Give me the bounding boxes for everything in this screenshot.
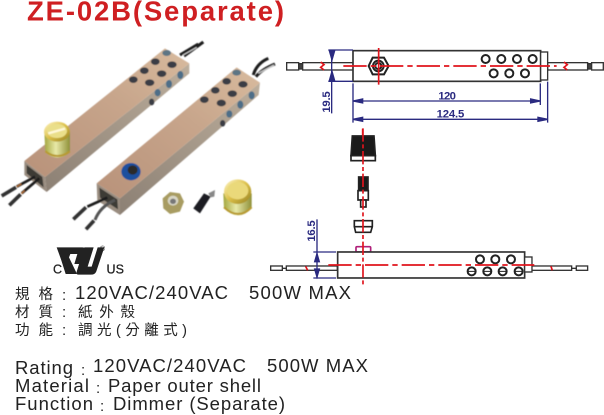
left dimmer bar bbox=[2, 42, 203, 205]
shaft bbox=[193, 190, 215, 213]
Chinese specifications: 500W MAX bbox=[249, 282, 351, 303]
wires bbox=[271, 266, 588, 270]
end tab bbox=[525, 257, 532, 272]
Chinese specifications: 120VAC/240VAC bbox=[75, 282, 228, 303]
UL certification mark: ® bbox=[100, 245, 106, 253]
Chinese specifications: : bbox=[62, 287, 66, 304]
top-view technical drawing bbox=[287, 48, 603, 137]
label: 19.5: 19.5 bbox=[321, 91, 333, 113]
holes bbox=[468, 255, 523, 275]
product photo bbox=[2, 42, 275, 229]
label: 120: 120 bbox=[438, 90, 456, 102]
English specifications: Material bbox=[15, 375, 89, 396]
Chinese specifications: : bbox=[62, 304, 66, 321]
blue grommet bbox=[121, 163, 141, 180]
threaded shaft bbox=[358, 177, 368, 207]
vent holes bbox=[482, 55, 537, 77]
Chinese specifications: 調光(分離式) bbox=[78, 321, 187, 339]
bar body bbox=[353, 51, 541, 81]
right wire bbox=[548, 63, 603, 70]
bar body bbox=[338, 252, 525, 278]
English specifications: Paper outer shell bbox=[108, 375, 261, 396]
label: 124.5: 124.5 bbox=[437, 109, 464, 121]
hex nut bbox=[163, 192, 184, 214]
English specifications: Function bbox=[15, 393, 93, 414]
dimensions bbox=[313, 219, 336, 278]
English specifications: 500W MAX bbox=[267, 355, 368, 376]
Chinese specifications: 材質 bbox=[15, 303, 53, 321]
red centre lines bbox=[306, 128, 552, 285]
Chinese specifications: : bbox=[62, 322, 66, 339]
English specifications: : bbox=[96, 380, 100, 397]
grommet bbox=[356, 247, 371, 252]
nut bbox=[354, 221, 372, 232]
exploded side-view technical drawing bbox=[271, 128, 588, 285]
English specifications bbox=[15, 355, 368, 415]
nut and shaft bbox=[369, 58, 389, 74]
dimensions bbox=[328, 50, 548, 123]
English specifications: : bbox=[81, 362, 85, 379]
English specifications: Dimmer (Separate) bbox=[113, 393, 285, 414]
English specifications: : bbox=[100, 398, 104, 415]
label: 16.5: 16.5 bbox=[306, 220, 318, 242]
UL certification mark: US bbox=[106, 262, 124, 276]
red centre lines bbox=[321, 48, 567, 137]
English specifications: Rating bbox=[15, 357, 73, 378]
left wire bbox=[287, 63, 353, 70]
Chinese specifications: 紙外殼 bbox=[78, 304, 136, 321]
right dimmer bar bbox=[73, 58, 275, 229]
spare knob bbox=[223, 179, 252, 215]
end tab bbox=[541, 52, 548, 80]
UL certification mark: C bbox=[53, 262, 62, 276]
English specifications: 120VAC/240VAC bbox=[93, 355, 246, 376]
Chinese specifications bbox=[15, 282, 351, 339]
UL certification mark bbox=[53, 245, 124, 276]
Chinese specifications: 功能 bbox=[15, 322, 54, 339]
Chinese specifications: 規格 bbox=[15, 286, 54, 303]
knob bbox=[44, 122, 70, 158]
knob bbox=[351, 136, 375, 161]
